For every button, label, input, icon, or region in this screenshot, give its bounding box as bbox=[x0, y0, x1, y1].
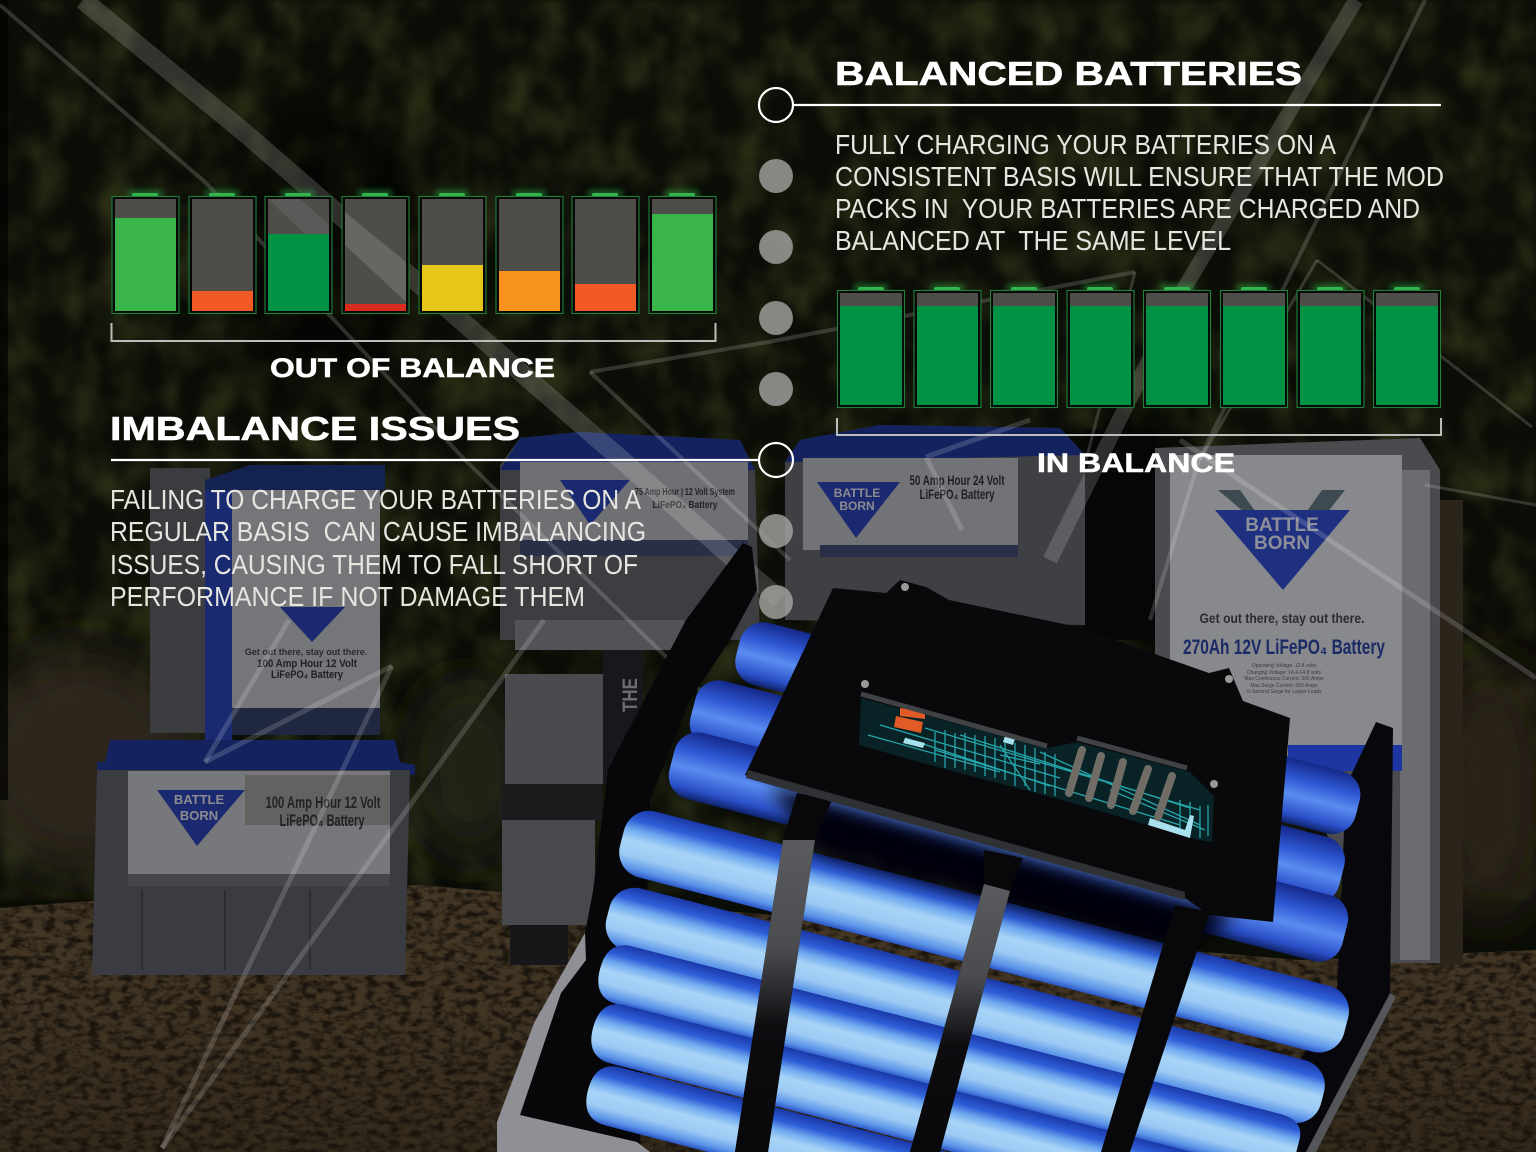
text block: imbalance issues: ISSUES, CAUSING THEM TO FALL SHORT OF bbox=[110, 549, 638, 580]
background: stacked blue-top battery, rear: 100 Amp Hour 12 Volt bbox=[257, 658, 357, 670]
background: 50 Amp Hour battery: LiFePO₄ Battery bbox=[920, 486, 995, 502]
background: stacked blue-top battery, rear: LiFePO₄ Battery bbox=[271, 669, 344, 681]
background: stacked blue-top battery, rear: Get out there, stay out there. bbox=[245, 647, 367, 657]
battery management board bbox=[745, 580, 1290, 922]
battery pack: black side frames and tray bbox=[497, 543, 1396, 1152]
background: stacked blue-top battery, rear bbox=[150, 465, 385, 740]
timeline marker and rule: balanced batteries bbox=[759, 88, 1441, 122]
background: 270Ah battery: BORN bbox=[1254, 533, 1310, 554]
text block: balanced batteries: PACKS IN YOUR BATTERIES ARE CHARGED AND bbox=[835, 193, 1420, 224]
background: front left battery: BATTLE bbox=[174, 792, 224, 807]
battery pack: retaining straps bbox=[735, 793, 1210, 1152]
label: out of balance: OUT OF BALANCE bbox=[270, 353, 555, 383]
background: front left battery: BORN bbox=[180, 808, 218, 823]
background: centre batteries: THE bbox=[619, 678, 642, 712]
background: front left battery bbox=[92, 740, 415, 975]
background: 270Ah battery: Max Continuous Current: 300 Amps bbox=[1244, 676, 1324, 682]
text block: balanced batteries: BALANCED AT THE SAME LEVEL bbox=[835, 225, 1231, 256]
circuit board window bbox=[859, 694, 1214, 842]
heading: imbalance issues: IMBALANCE ISSUES bbox=[110, 410, 520, 447]
bracket: in balance bbox=[837, 418, 1441, 435]
background: 50 Amp Hour battery: 50 Amp Hour 24 Volt bbox=[910, 472, 1005, 488]
text block: imbalance issues: PERFORMANCE IF NOT DAMAGE THEM bbox=[110, 581, 585, 612]
background: 270Ah battery: 270Ah 12V LiFePO₄ Battery bbox=[1183, 636, 1385, 659]
battery chart: in balance bbox=[838, 284, 1440, 408]
text block: imbalance issues bbox=[110, 484, 646, 612]
background: centre batteries: LiFePO₄ Battery bbox=[652, 500, 718, 511]
background: 270Ah battery: BATTLE bbox=[1245, 515, 1319, 536]
background: centre batteries: 75 Amp Hour | 12 Volt System bbox=[635, 487, 735, 498]
battery pack: front blue glowing cells bbox=[586, 805, 1355, 1152]
background: 270Ah battery: Max Surge Current: 500 Amps bbox=[1250, 683, 1318, 689]
background: 270Ah battery bbox=[1085, 430, 1463, 965]
label: in balance: IN BALANCE bbox=[1037, 448, 1235, 478]
text block: imbalance issues: REGULAR BASIS CAN CAUSE IMBALANCING bbox=[110, 516, 646, 547]
background: 50 Amp Hour battery: BORN bbox=[839, 499, 875, 513]
text block: balanced batteries bbox=[835, 129, 1444, 256]
battery pack: upper blue cells bbox=[663, 617, 1366, 967]
background: 270Ah battery: Get out there, stay out there. bbox=[1200, 610, 1364, 626]
background: front left battery: LiFePO₄ Battery bbox=[280, 811, 365, 830]
timeline marker and rule: imbalance issues bbox=[111, 443, 793, 477]
background: front left battery: 100 Amp Hour 12 Volt bbox=[266, 793, 381, 812]
background: 50 Amp Hour battery bbox=[785, 425, 1085, 625]
battery chart: out of balance bbox=[112, 190, 716, 314]
heading: balanced batteries: BALANCED BATTERIES bbox=[835, 55, 1302, 92]
timeline: vertical connector dots bbox=[759, 159, 793, 619]
background: 270Ah battery: Charging Voltage: 14.4-14.8 volts bbox=[1247, 670, 1321, 676]
text block: balanced batteries: FULLY CHARGING YOUR BATTERIES ON A bbox=[835, 129, 1337, 160]
text block: balanced batteries: CONSISTENT BASIS WILL ENSURE THAT THE MOD bbox=[835, 161, 1444, 192]
background: 270Ah battery: Operating Voltage: 12.8 volts bbox=[1252, 663, 1317, 669]
bracket: out of balance bbox=[112, 323, 716, 341]
background: 50 Amp Hour battery: BATTLE bbox=[834, 486, 880, 500]
background: centre batteries bbox=[500, 432, 760, 965]
battery pack: shadow under board bbox=[770, 785, 1235, 950]
text block: imbalance issues: FAILING TO CHARGE YOUR BATTERIES ON A bbox=[110, 484, 642, 515]
background: 270Ah battery: ½ Second Surge for Larger Loads bbox=[1246, 688, 1322, 695]
